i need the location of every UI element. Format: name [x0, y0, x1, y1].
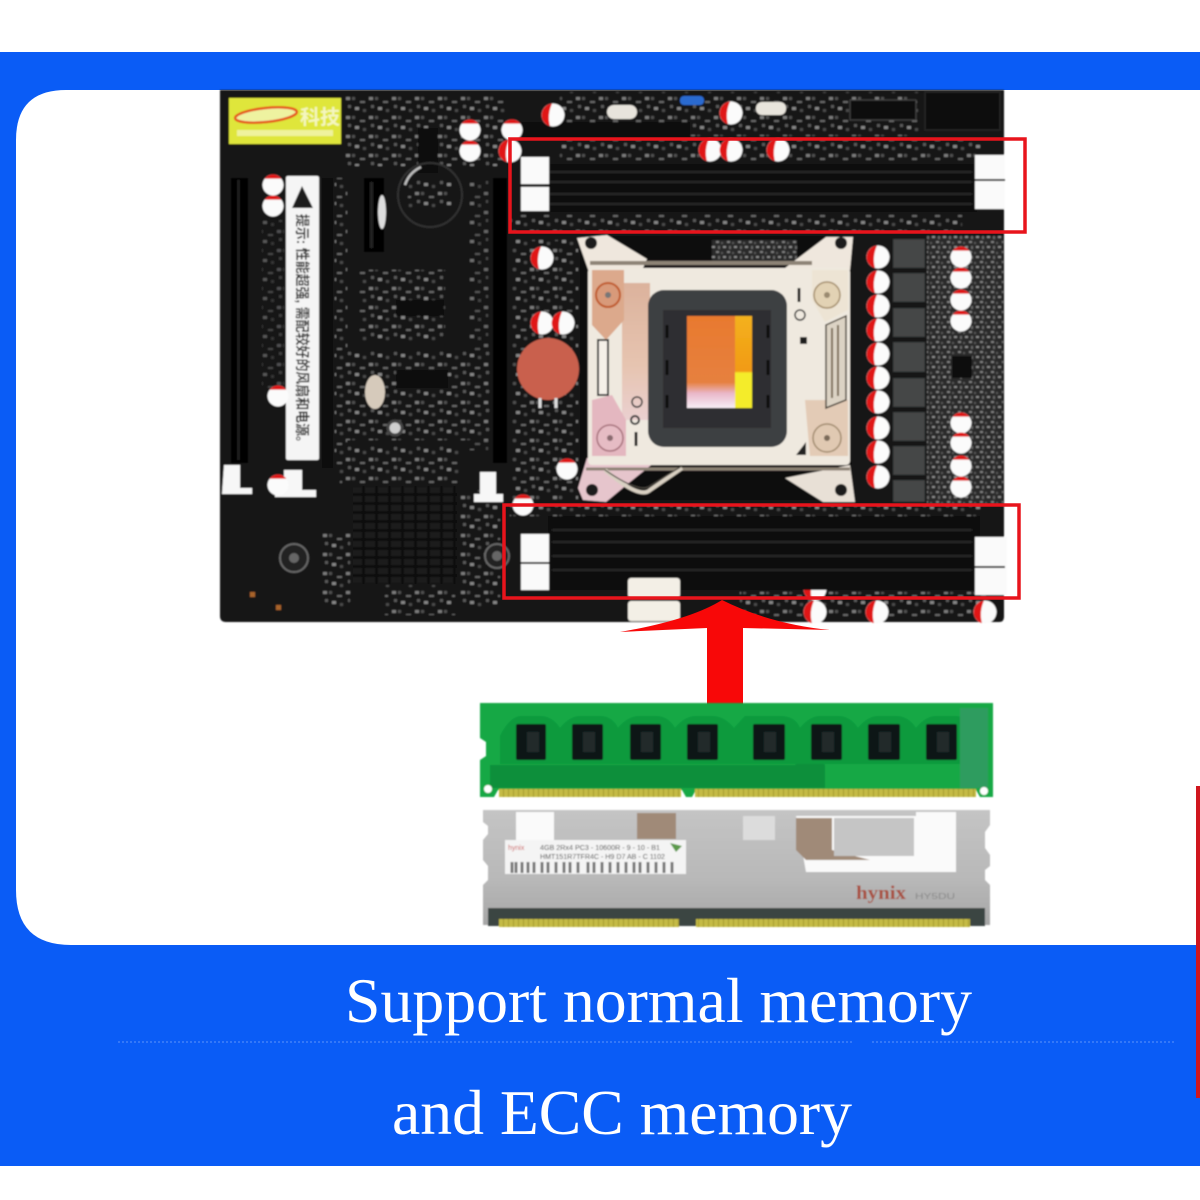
frame plate: [588, 268, 850, 465]
gold contacts: [499, 789, 976, 797]
screws: [596, 283, 620, 307]
copper plate: [622, 283, 650, 420]
motherboard: [220, 90, 1007, 624]
mounting holes: [484, 785, 988, 795]
socket surroundings: [580, 236, 852, 500]
side levers: [598, 340, 608, 395]
mounting arms: [577, 235, 647, 275]
lock symbols: [636, 288, 799, 446]
logo sticker: [229, 98, 341, 144]
vrm controller chip: [952, 356, 972, 378]
connectors: [418, 92, 1002, 234]
chipset heatsink: [353, 486, 457, 584]
chip markings: [527, 732, 949, 752]
product label: hynix: [508, 845, 525, 852]
silver ecc memory module: [483, 810, 990, 927]
memory chips: [516, 724, 957, 760]
red highlight box: bottom memory slots: [504, 505, 1019, 598]
warning label: [286, 176, 319, 460]
green normal memory module: [480, 703, 993, 797]
product label: [505, 840, 686, 874]
gold contacts: [499, 919, 970, 927]
vrm chokes: [893, 239, 925, 502]
red edge line: [1196, 786, 1200, 1098]
logo sticker: 科技: [300, 106, 340, 129]
bottom memory slots: [521, 516, 1007, 595]
caption line 1: Support normal memory: [345, 966, 973, 1036]
crystals and chips: [250, 300, 509, 610]
top memory slots: [521, 155, 1005, 212]
expansion slots: [231, 178, 507, 468]
product label: 4GB 2Rx4 PC3 - 10600R - 9 - 10 - B1: [540, 845, 660, 852]
slot latches: [222, 465, 503, 502]
warning sticker: [687, 316, 752, 408]
cmos battery: [517, 338, 579, 408]
hynix logo: [856, 883, 955, 904]
sata ports: [628, 578, 680, 621]
red highlight box: top memory slots: [510, 139, 1025, 232]
caption line 2: and ECC memory: [392, 1078, 853, 1148]
component clusters: [262, 92, 1003, 618]
capacitors: [262, 102, 996, 624]
white content panel: [16, 90, 1200, 945]
dark socket: [648, 290, 787, 447]
product label: HMT151R7TFR4C - H9 D7 AB - C 1102: [540, 854, 665, 861]
warning label: 提示: 性能超强, 需配较好的风扇和电源。: [293, 214, 311, 449]
hynix logo: hynix: [856, 883, 907, 904]
dotted dividers: [118, 1041, 1175, 1043]
cpu socket: [577, 235, 855, 502]
bios ring: [398, 163, 462, 227]
red arrow: [620, 600, 830, 712]
hynix logo: HY5DU: [915, 892, 955, 901]
